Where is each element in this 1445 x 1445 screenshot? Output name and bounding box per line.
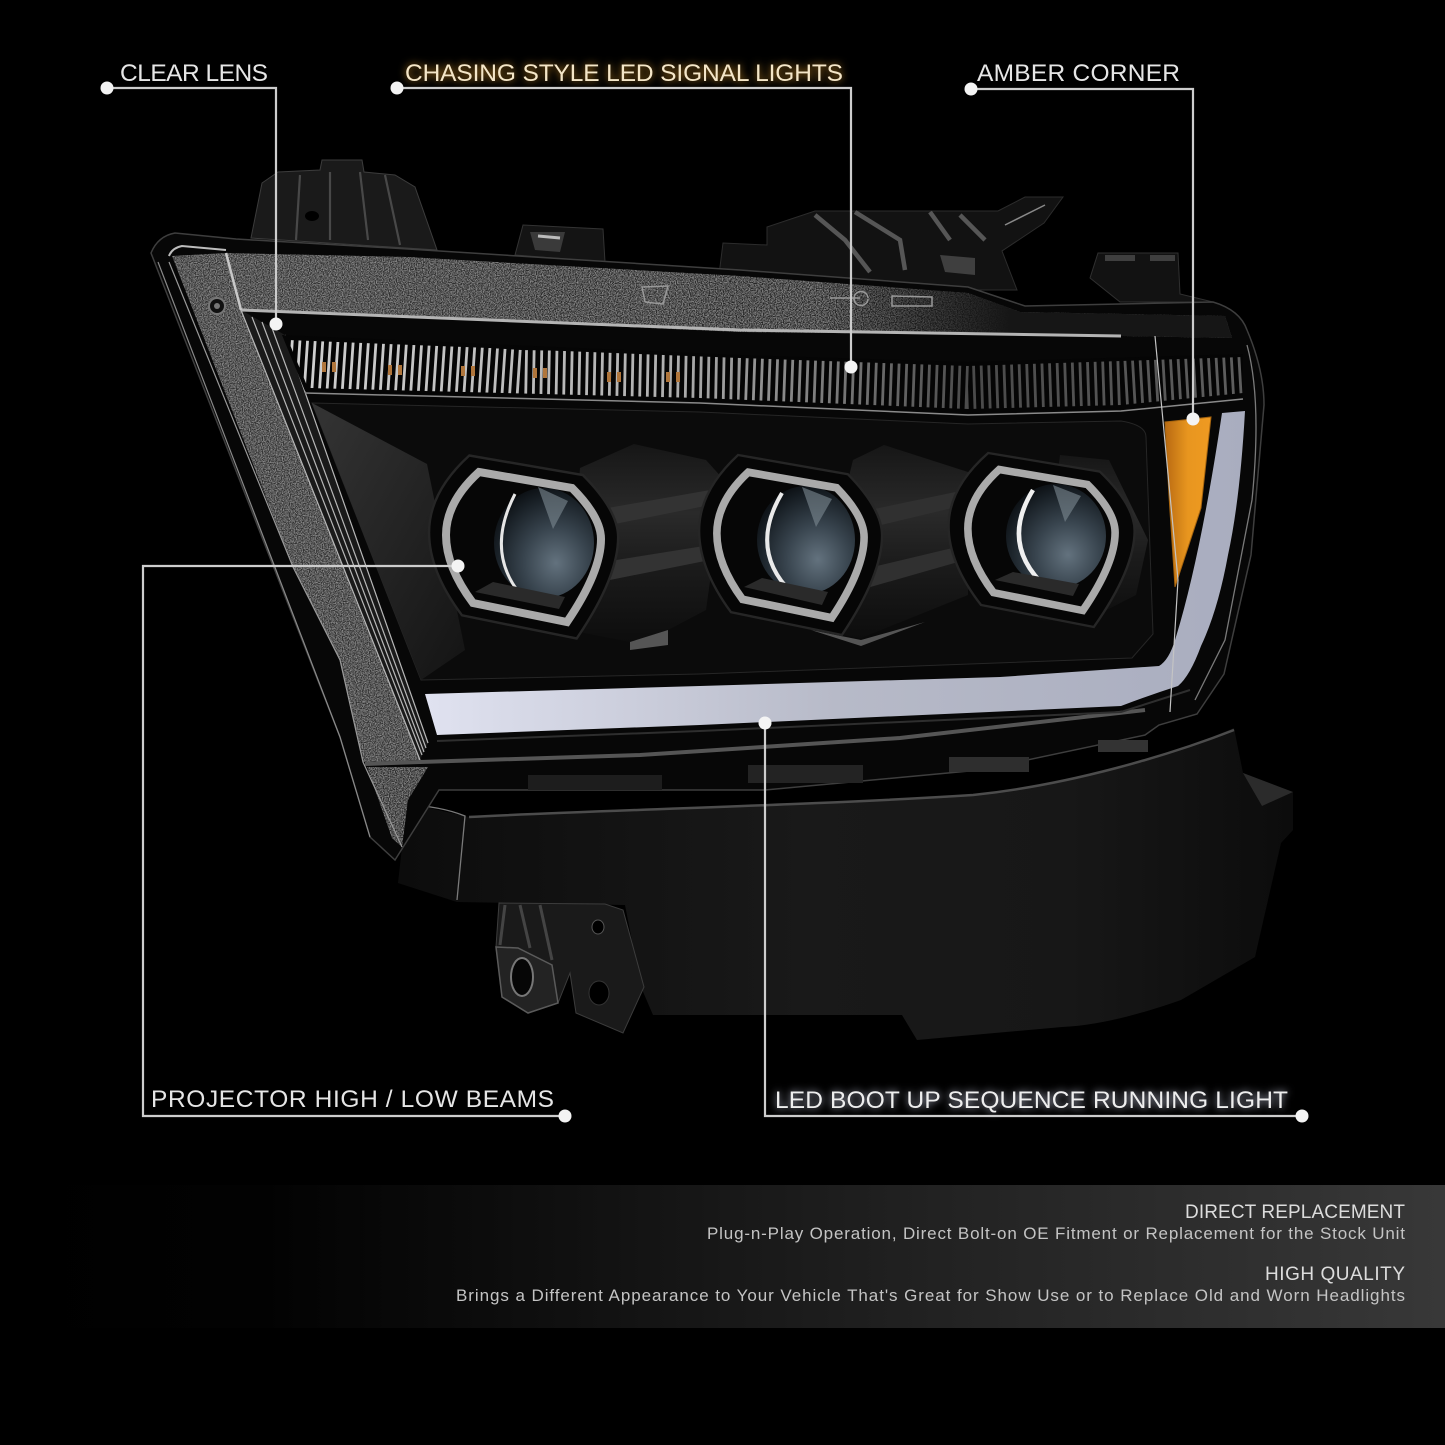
inner bezel panel [312,403,1153,680]
feature: direct replacement: DIRECT REPLACEMENT [1185,1202,1405,1223]
lower bumper trim [398,728,1293,1040]
grey side panel [312,403,465,680]
rear connector small [515,225,605,262]
callout: clear lens: CLEAR LENS [120,60,268,87]
feature band [0,1185,1445,1328]
callout: clear lens [100,60,282,330]
projector housing bodies [569,444,1148,650]
textured upper band [226,253,1232,338]
callout: projector high and low beams [143,560,572,1122]
textured lower corner [367,767,428,847]
callout: LED boot up sequence running light [758,716,1308,1122]
callout: chasing style LED signal lights [390,60,858,374]
projector 1 [429,456,618,638]
feature: high quality: Brings a Different Appearance to Your Vehicle That's Great for Show Use or to Replace Old and Worn Headlights [456,1286,1405,1305]
feature: direct replacement [707,1202,1405,1243]
amber corner reflector [1165,417,1211,587]
callout: LED boot up sequence running light: LED BOOT UP SEQUENCE RUNNING LIGHT [775,1087,1288,1114]
housing body [151,233,1264,860]
feature: high quality [456,1264,1405,1305]
rear connector left [251,160,437,250]
feature: direct replacement: Plug-n-Play Operation, Direct Bolt-on OE Fitment or Replacement for the Stock Unit [707,1224,1405,1243]
callout: amber corner: AMBER CORNER [977,60,1180,87]
feature: high quality: HIGH QUALITY [1265,1264,1405,1285]
housing lower edge detail [437,336,1256,790]
textured left pillar [172,253,420,762]
callout: projector high and low beams: PROJECTOR HIGH / LOW BEAMS [151,1086,554,1113]
projector 2 [699,455,882,635]
callout: chasing style LED signal lights: CHASING STYLE LED SIGNAL LIGHTS [405,60,843,87]
rear clips right [1090,253,1213,302]
projector 3 [949,453,1135,627]
mounting bracket [496,903,644,1033]
clear lens trim strip [158,246,1145,847]
LED running light bar [425,411,1245,735]
top embossed logo marks [642,286,932,306]
rear clips centre [719,197,1063,290]
callout: amber corner [964,60,1200,426]
chasing signal comb lens [282,335,1243,415]
icon: mounting screw on pillar [209,298,225,314]
